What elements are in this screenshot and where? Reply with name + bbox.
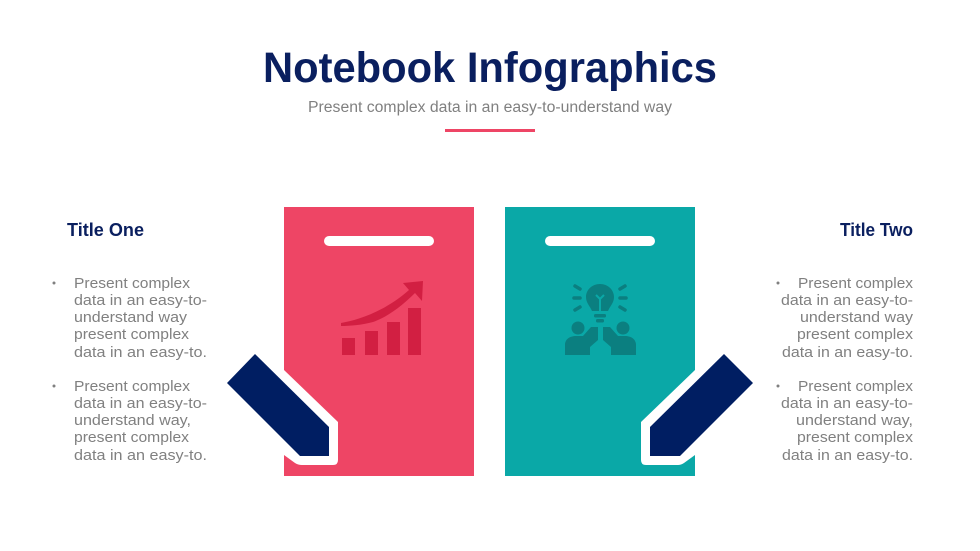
heading: title one: Title One [67, 220, 144, 240]
text block: right column [776, 275, 914, 464]
heading: title two: Title Two [840, 220, 913, 240]
icon: pencil [227, 354, 329, 456]
icon: pencil [650, 354, 753, 456]
text block: left column [52, 275, 207, 464]
subtitle: Present complex data in an easy-to-understand way [308, 99, 672, 116]
text block: left column: Present complex [74, 378, 191, 395]
text block: left column: present complex [74, 326, 190, 343]
text block: right column: data in an easy-to. [782, 447, 913, 464]
accent underline [445, 129, 535, 132]
text block: right column: understand way, [796, 412, 913, 429]
notebook label bar [545, 236, 655, 246]
text block: right column: understand way [800, 309, 914, 326]
text block: left column: understand way, [74, 412, 191, 429]
text block: right column: data in an easy-to- [781, 292, 913, 309]
text block: left column: Present complex [74, 275, 191, 292]
icon: people with light bulb [565, 284, 636, 355]
panel: right notebook [505, 207, 753, 476]
text block: left column: data in an easy-to. [74, 447, 207, 464]
panel: left notebook [227, 207, 474, 476]
pencil cutout [641, 370, 710, 465]
text block: left column: understand way [74, 309, 188, 326]
notebook label bar [324, 236, 434, 246]
text block: left column: data in an easy-to. [74, 344, 207, 361]
text block: left column: data in an easy-to- [74, 395, 207, 412]
title: Notebook Infographics [263, 44, 717, 92]
text block: right column: present complex [797, 429, 914, 446]
text block: right column: Present complex [798, 275, 914, 292]
text block: left column: data in an easy-to- [74, 292, 207, 309]
text block: left column: present complex [74, 429, 190, 446]
text block: right column: data in an easy-to- [781, 395, 913, 412]
pencil cutout [270, 370, 338, 465]
text block: right column: present complex [797, 326, 914, 343]
text block: right column: Present complex [798, 378, 914, 395]
icon: growth chart [341, 281, 423, 355]
text block: right column: data in an easy-to. [782, 344, 913, 361]
